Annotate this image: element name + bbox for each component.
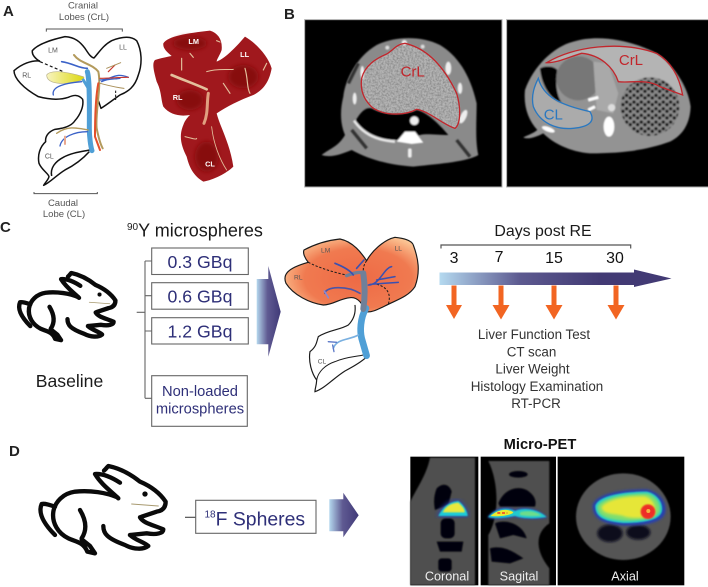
label: CrL: CrL xyxy=(619,52,643,69)
box: 0.6 GBq: 0.6 GBq xyxy=(168,286,232,306)
photo labels: LM xyxy=(188,37,199,46)
box: non-loaded microspheres: Non-loaded xyxy=(162,384,238,400)
text: lobes crl: Lobes (CrL) xyxy=(59,12,109,23)
heading: 90Y microspheres: Y microspheres xyxy=(138,221,263,241)
panel A: liver diagram xyxy=(14,29,141,194)
timeline bracket xyxy=(441,245,631,248)
box: 1.2 GBq xyxy=(152,318,248,344)
vessels xyxy=(53,55,128,151)
readout list: Liver Weight xyxy=(495,362,570,376)
photo labels: CL xyxy=(205,159,215,168)
PET axial xyxy=(558,457,684,585)
box: non-loaded microspheres xyxy=(152,376,247,426)
PET coronal xyxy=(410,457,478,585)
photo labels: RL xyxy=(173,93,183,102)
lobe labels: LM xyxy=(48,47,58,54)
dose tree connector xyxy=(137,261,152,398)
label: CL: CL xyxy=(544,106,563,123)
label: CrL: CrL xyxy=(401,63,425,80)
readout list: Liver Function Test xyxy=(478,327,590,342)
readout list: CT scan xyxy=(507,344,556,360)
PET sagittal: Sagital xyxy=(500,569,538,583)
icon: rabbit baseline xyxy=(19,273,115,340)
lobe labels: CL xyxy=(45,154,54,161)
heading: Micro-PET: Micro-PET xyxy=(504,437,576,453)
lobe labels: LL xyxy=(119,45,127,52)
photo labels xyxy=(173,37,250,168)
lobe labels: CL xyxy=(318,358,327,365)
text: baseline: Baseline xyxy=(36,371,103,391)
readout list xyxy=(471,327,603,411)
lobe labels: RL xyxy=(22,72,31,79)
liver outline xyxy=(14,37,141,185)
PET sagittal xyxy=(481,457,556,585)
day labels: 3 xyxy=(450,250,459,267)
box: 1.2 GBq: 1.2 GBq xyxy=(168,322,232,342)
lobe labels: RL xyxy=(294,274,303,281)
box: non-loaded microspheres: microspheres xyxy=(156,402,244,418)
text: cranial lobes: Cranial xyxy=(68,0,98,12)
lobe labels: LL xyxy=(395,245,402,252)
panel A: liver photograph xyxy=(153,31,272,182)
text: caudal: Caudal xyxy=(48,198,78,209)
connector xyxy=(185,516,196,518)
heading: days post RE: Days post RE xyxy=(494,223,592,240)
PET coronal: Coronal xyxy=(425,569,469,583)
timeline arrow xyxy=(440,270,672,287)
day labels xyxy=(450,249,624,267)
day labels: 30 xyxy=(606,250,624,267)
box: 0.6 GBq xyxy=(152,283,248,309)
contour: CrL xyxy=(547,46,683,95)
orange arrows xyxy=(446,286,624,320)
panel label D: D xyxy=(9,443,20,460)
box: 0.3 GBq: 0.3 GBq xyxy=(168,252,232,272)
arrow: treatment xyxy=(257,266,281,357)
photo labels: LL xyxy=(240,50,250,59)
bracket: cranial lobes xyxy=(46,29,122,32)
panel label C: C xyxy=(0,219,11,236)
CT scan left xyxy=(305,20,502,187)
lobe labels xyxy=(22,45,127,161)
CT scan right xyxy=(507,20,708,187)
heading: 90Y microspheres: 90 xyxy=(127,222,139,233)
arrow: to imaging xyxy=(329,493,359,537)
lobe labels xyxy=(294,245,402,365)
box: 0.3 GBq xyxy=(152,248,248,274)
panel label B: B xyxy=(284,6,295,23)
readout list: RT-PCR xyxy=(511,396,561,411)
gallbladder xyxy=(47,72,84,83)
box: 18F spheres xyxy=(196,500,316,533)
day labels: 15 xyxy=(545,250,563,267)
contour: CL xyxy=(532,78,592,129)
text: lobe cl: Lobe (CL) xyxy=(43,209,85,220)
box: 18F spheres: F Spheres xyxy=(216,509,305,531)
icon: rabbit PET xyxy=(40,466,166,553)
day labels: 7 xyxy=(495,249,504,266)
box: 18F spheres: 18 xyxy=(204,510,216,521)
panel D: PET images xyxy=(410,457,684,585)
readout list: Histology Examination xyxy=(471,379,603,394)
panel C: treated liver diagram xyxy=(285,237,418,392)
contour: CrL xyxy=(361,43,460,128)
PET axial: Axial xyxy=(611,569,639,583)
vessel tree xyxy=(324,260,398,356)
panel label A: A xyxy=(3,3,14,20)
panel B: CT scans xyxy=(305,20,708,187)
bracket: caudal lobe xyxy=(34,192,97,194)
lobe labels: LM xyxy=(321,247,330,254)
